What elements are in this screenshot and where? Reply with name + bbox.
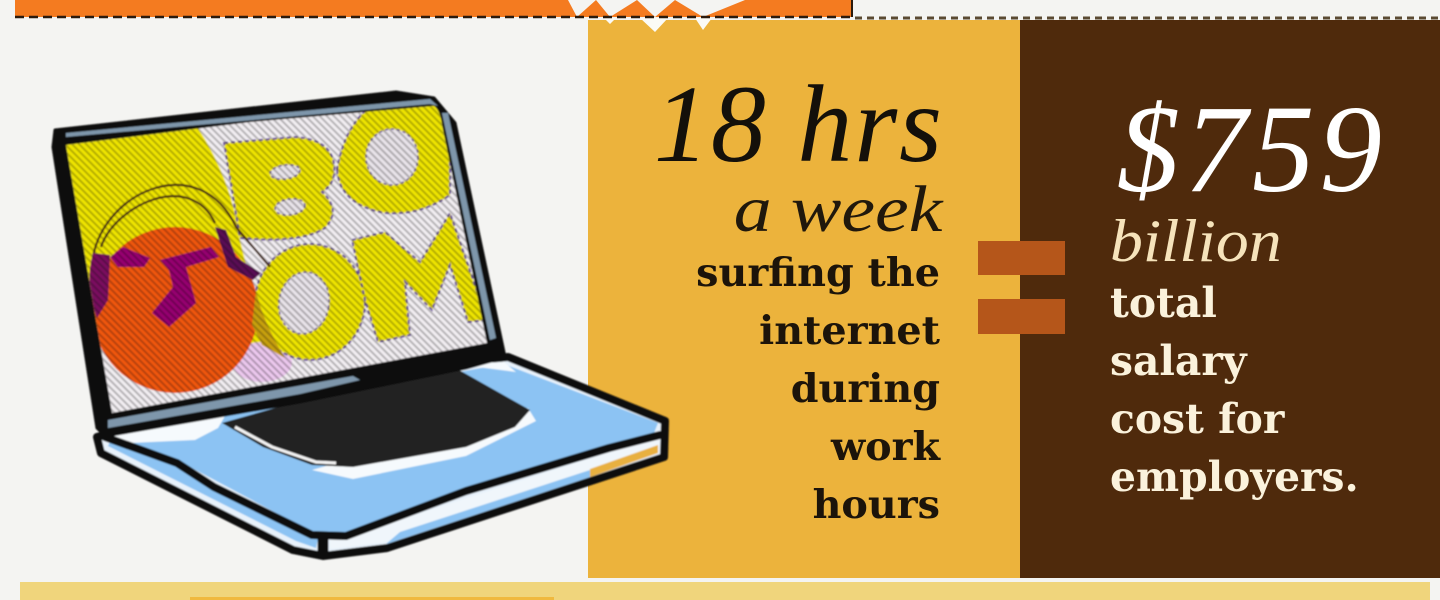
equals sign bbox=[978, 241, 1065, 334]
text block: surfing the internet during work hours: during bbox=[791, 366, 940, 412]
headphones bbox=[93, 185, 270, 267]
panel: gold bbox=[588, 20, 1020, 578]
overlap of globe and letter O bbox=[252, 290, 285, 358]
globe bbox=[92, 227, 258, 393]
yellow blob bbox=[64, 127, 262, 344]
text block: total salary cost for employers bbox=[1110, 279, 1359, 501]
deck front edge bbox=[105, 435, 660, 536]
keyboard deck bbox=[113, 364, 658, 533]
text block: total salary cost for employers: salary bbox=[1110, 337, 1247, 385]
heading: $759: $759 bbox=[1117, 81, 1387, 219]
laptop lid bbox=[53, 92, 505, 436]
panel: brown bbox=[1020, 20, 1440, 578]
text block: surfing the internet during work hours: surfing the bbox=[696, 250, 940, 296]
top orange band bbox=[15, 0, 852, 17]
text block: surfing the internet during work hours: work bbox=[831, 424, 940, 470]
text block: total salary cost for employers: cost for bbox=[1110, 395, 1284, 443]
subheading: a week: a week bbox=[733, 173, 942, 246]
text block: surfing the internet during work hours bbox=[696, 250, 941, 528]
lavender bbox=[232, 342, 292, 382]
laptop base silhouette bbox=[97, 357, 665, 556]
screen bbox=[64, 104, 488, 414]
BOOM letters bbox=[224, 100, 487, 360]
dashed rule bbox=[15, 16, 855, 18]
white starburst spikes bbox=[604, 18, 712, 32]
heading: 18 hrs: 18 hrs bbox=[654, 63, 944, 185]
bottom band bbox=[20, 582, 1430, 600]
subheading: billion: billion bbox=[1110, 208, 1282, 274]
text block: surfing the internet during work hours: hours bbox=[813, 482, 940, 528]
trackpad highlight bbox=[312, 408, 536, 479]
text block: total salary cost for employers: employers. bbox=[1110, 453, 1359, 501]
text block: surfing the internet during work hours: internet bbox=[759, 308, 940, 354]
icon: laptop bbox=[50, 90, 665, 556]
text block: total salary cost for employers: total bbox=[1110, 279, 1217, 327]
side strips bbox=[108, 438, 318, 548]
trackpad bbox=[222, 370, 530, 467]
